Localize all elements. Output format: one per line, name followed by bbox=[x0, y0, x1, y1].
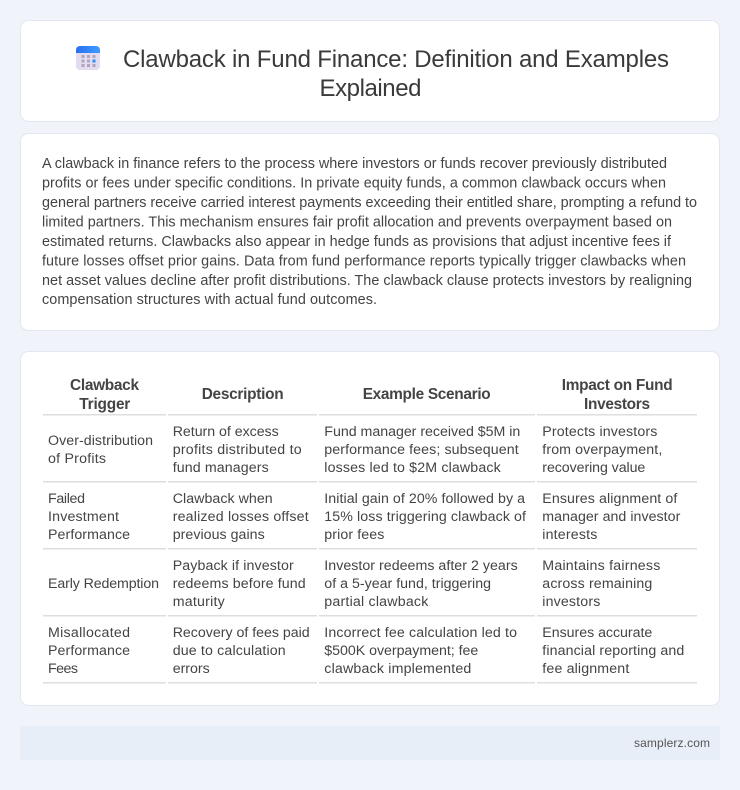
table row: failed investment performance: Clawback when bbox=[173, 491, 273, 507]
panel: introduction text: profits or fees under specific conditions. In private equity funds, a common clawback occurs when bbox=[42, 176, 666, 192]
table row: over-distribution of profits: from overpayment, bbox=[542, 442, 662, 458]
table row: over-distribution of profits: losses led to $2M clawback bbox=[324, 460, 502, 476]
panel: title header bbox=[20, 20, 720, 122]
table row: over-distribution of profits: performance fees; subsequent bbox=[324, 442, 519, 458]
table row: misallocated performance fees bbox=[43, 625, 697, 684]
table row: over-distribution of profits: profits distributed to bbox=[173, 442, 302, 458]
table row: misallocated performance fees: Fees bbox=[48, 661, 78, 677]
table row: misallocated performance fees: fee alignment bbox=[542, 661, 629, 677]
table row: failed investment performance: Initial gain of 20% followed by a bbox=[324, 491, 525, 507]
table row: over-distribution of profits: recovering value bbox=[542, 460, 645, 476]
table header row: Clawback bbox=[70, 377, 139, 394]
table row: over-distribution of profits: fund managers bbox=[173, 460, 269, 476]
table row: early redemption: Investor redeems after 2 years bbox=[324, 558, 518, 574]
table row: misallocated performance fees: Ensures accurate bbox=[542, 625, 652, 641]
table row: early redemption: Maintains fairness bbox=[542, 558, 660, 574]
table row: early redemption: redeems before fund bbox=[173, 576, 306, 592]
table row: early redemption: Early Redemption bbox=[48, 576, 159, 592]
table row: early redemption: of a 5-year fund, triggering bbox=[324, 576, 491, 592]
table row: misallocated performance fees: Performance bbox=[48, 643, 130, 659]
table row: misallocated performance fees: financial reporting and bbox=[542, 643, 684, 659]
title: Explained bbox=[320, 75, 422, 102]
table row: misallocated performance fees: Misallocated bbox=[48, 625, 130, 641]
table row: over-distribution of profits: Fund manager received $5M in bbox=[324, 424, 520, 440]
table row: early redemption: Payback if investor bbox=[173, 558, 294, 574]
panel: introduction text: future losses offset prior gains. Data from fund performance reports typically trigger clawbacks when bbox=[42, 253, 686, 269]
table row: failed investment performance: Failed bbox=[48, 491, 85, 507]
table row: over-distribution of profits: Protects investors bbox=[542, 424, 657, 440]
table header row: Description bbox=[202, 386, 284, 403]
table row: over-distribution of profits bbox=[43, 424, 697, 482]
table row: early redemption: investors bbox=[542, 594, 600, 610]
table row: misallocated performance fees: clawback implemented bbox=[324, 661, 471, 677]
table header row: Example Scenario bbox=[363, 386, 491, 403]
table header row: Trigger bbox=[79, 396, 130, 413]
table header row: Investors bbox=[584, 396, 650, 413]
table row: over-distribution of profits: of Profits bbox=[48, 451, 106, 467]
table row: failed investment performance: Investment bbox=[48, 509, 119, 525]
footer: samplerz.com bbox=[634, 736, 710, 750]
table row: early redemption bbox=[43, 558, 697, 616]
title: Clawback in Fund Finance: Definition and Examples bbox=[123, 46, 669, 73]
table row: failed investment performance: 15% loss triggering clawback of bbox=[324, 509, 526, 525]
table row: misallocated performance fees: Recovery of fees paid bbox=[173, 625, 310, 641]
panel: introduction text: limited partners. This mechanism ensures fair profit allocation and prevents overpayment based on bbox=[42, 214, 672, 230]
panel: introduction text: estimated returns. Clawbacks also appear in hedge funds as provisions that adjust incentive fees if bbox=[42, 234, 672, 250]
table row: failed investment performance: prior fees bbox=[324, 527, 384, 543]
table row: failed investment performance: manager and investor bbox=[542, 509, 681, 525]
table row: failed investment performance: interests bbox=[542, 527, 597, 543]
table row: misallocated performance fees: errors bbox=[173, 661, 210, 677]
panel: clawback table bbox=[20, 352, 720, 706]
table row: misallocated performance fees: Incorrect fee calculation led to bbox=[324, 625, 517, 641]
panel: introduction text: A clawback in finance refers to the process where investors or funds recover previously distributed bbox=[42, 156, 667, 172]
table row: failed investment performance: Ensures alignment of bbox=[542, 491, 677, 507]
table row: failed investment performance: previous gains bbox=[173, 527, 265, 543]
table row: early redemption: partial clawback bbox=[324, 594, 429, 610]
table row: over-distribution of profits: Return of excess bbox=[173, 424, 279, 440]
table row: failed investment performance: Performance bbox=[48, 527, 130, 543]
table row: misallocated performance fees: $500K overpayment; fee bbox=[324, 643, 478, 659]
panel: introduction text: general partners receive carried interest payments exceeding their entitled share, prompting a refund to bbox=[42, 195, 697, 211]
title bbox=[123, 46, 669, 102]
table row: early redemption: maturity bbox=[173, 594, 226, 610]
table row: early redemption: across remaining bbox=[542, 576, 652, 592]
footer bbox=[20, 726, 720, 760]
table row: failed investment performance bbox=[43, 491, 697, 550]
icon: calendar bbox=[76, 46, 100, 70]
table row: misallocated performance fees: due to calculation bbox=[173, 643, 286, 659]
table row: failed investment performance: realized losses offset bbox=[173, 509, 309, 525]
table row: over-distribution of profits: Over-distribution bbox=[48, 433, 153, 449]
panel: introduction text: compensation structures with actual fund outcomes. bbox=[42, 292, 377, 308]
panel: introduction text bbox=[20, 134, 720, 330]
panel: introduction text: net asset values decline after profit distributions. The clawback clause protects investors by realigning bbox=[42, 273, 692, 289]
table header row: Impact on Fund bbox=[562, 377, 673, 394]
table header row bbox=[43, 377, 697, 416]
